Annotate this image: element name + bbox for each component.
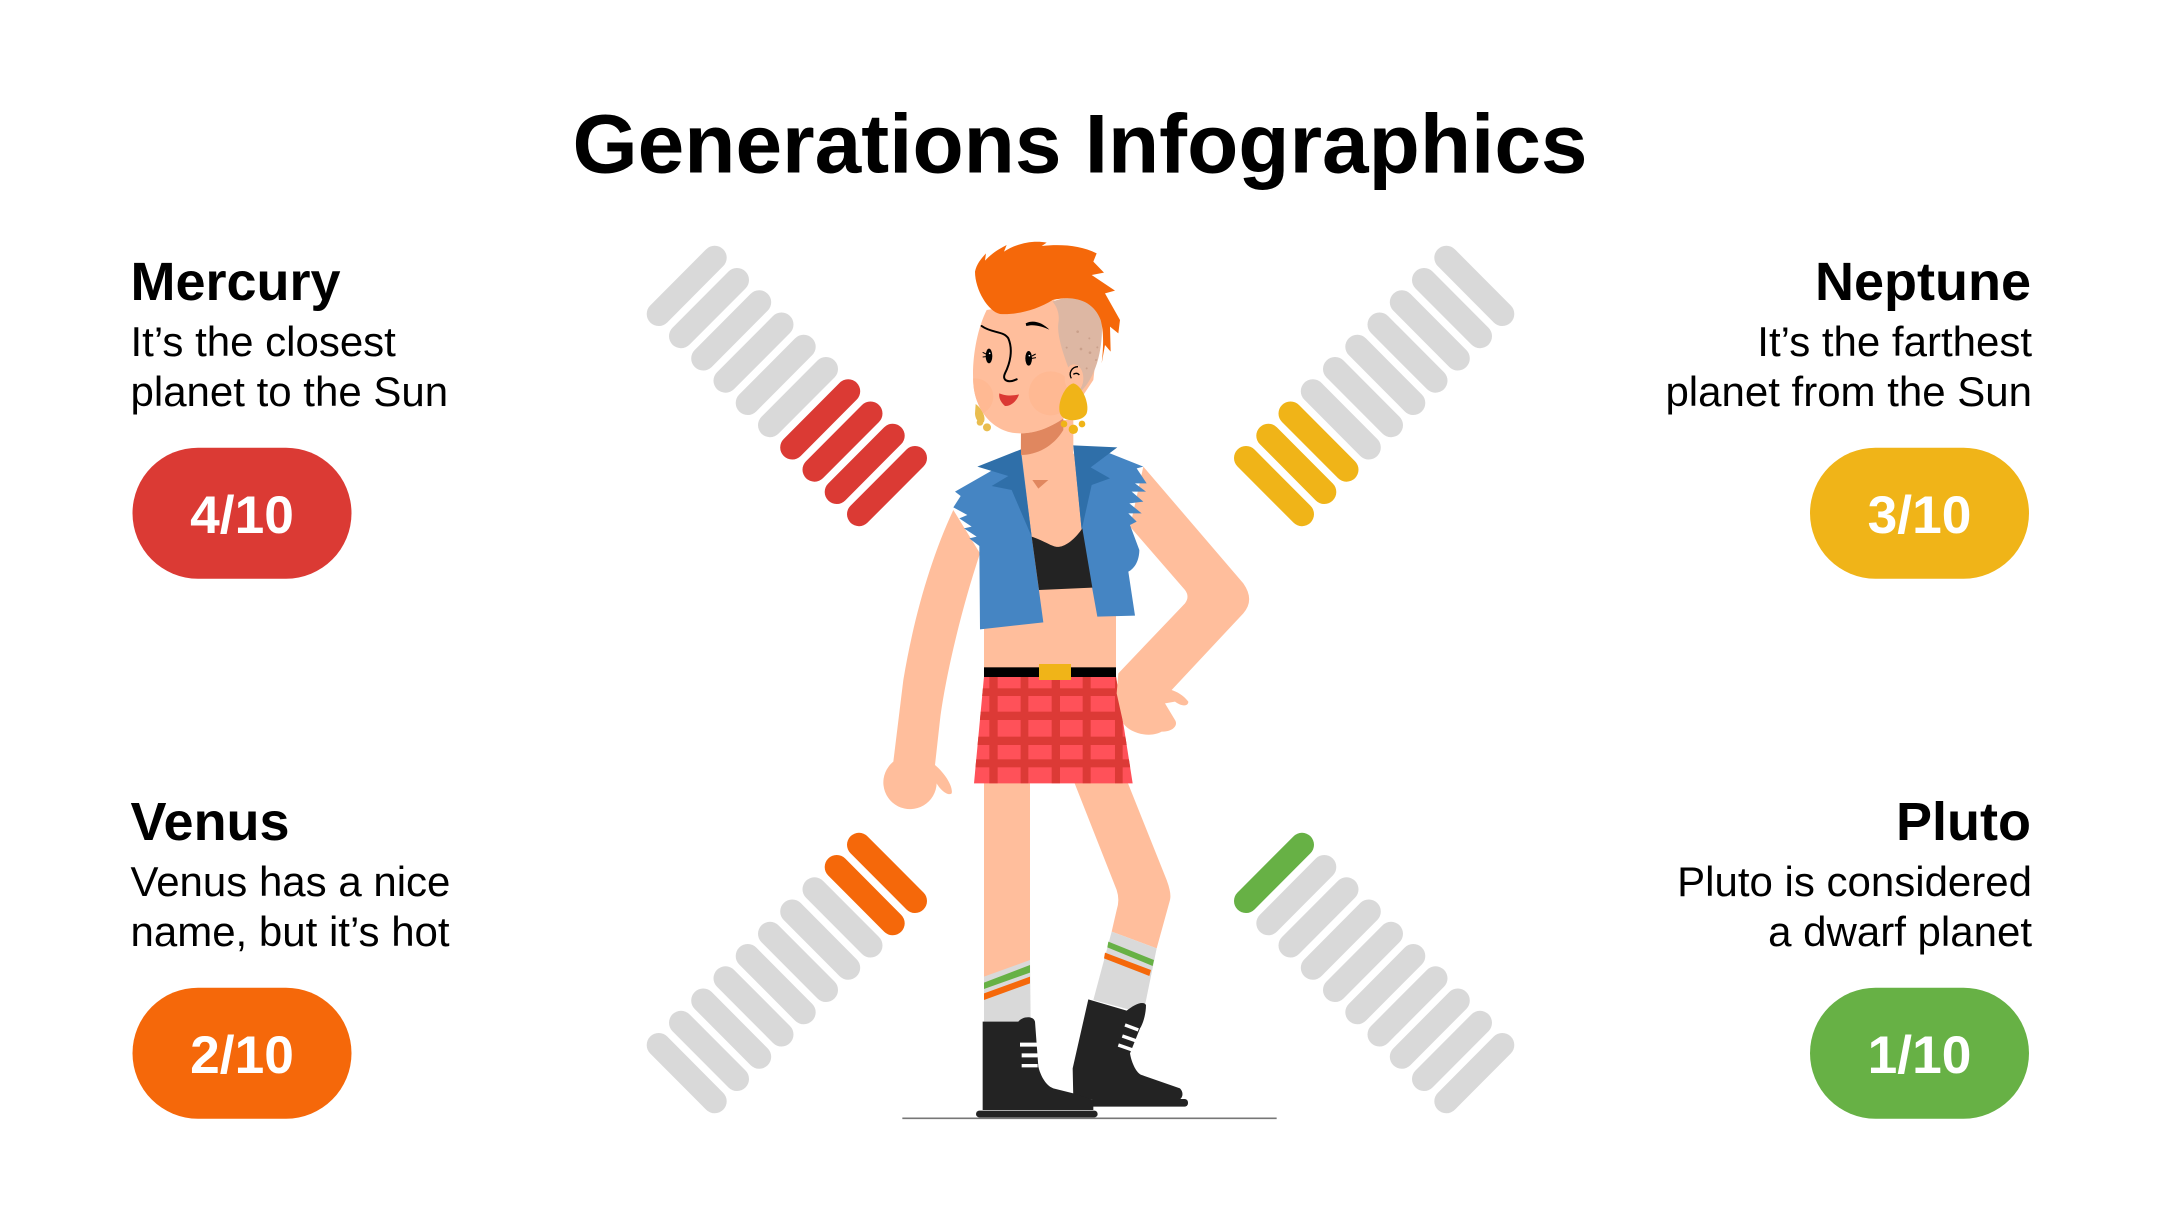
panel: Venus: [130, 792, 450, 1119]
crop top: [1032, 528, 1092, 590]
text: Pluto description: a dwarf planet: [1768, 908, 2032, 955]
panel: Mercury: [130, 252, 448, 579]
legs: [984, 780, 1170, 1023]
text: Venus description: name, but it’s hot: [130, 908, 450, 955]
score pill: 2/10: 2/10: [190, 1026, 294, 1085]
score pill: 1/10: 1/10: [1868, 1026, 1971, 1085]
heading: Pluto: Pluto: [1896, 792, 2031, 852]
socks: [984, 932, 1157, 1023]
illustration: punk character: [883, 242, 1277, 1118]
text: Venus description: Venus has a nice: [130, 858, 450, 905]
vest: [953, 445, 1147, 629]
meter: Pluto 1 of 10 bars: [1246, 845, 1502, 1101]
belt: [984, 664, 1116, 680]
boots: [976, 999, 1188, 1117]
title: Generations Infographics: [572, 96, 1588, 190]
text: Neptune description: It’s the farthest: [1757, 318, 2032, 365]
score pill: 3/10: [1810, 448, 2029, 579]
meter: Mercury 4 of 10 bars: [659, 258, 915, 514]
head: [973, 298, 1102, 434]
left arm and hand: [883, 510, 980, 809]
neck shadow: [1021, 417, 1063, 489]
text: Mercury description: It’s the closest: [130, 318, 396, 365]
skirt: [973, 673, 1133, 787]
left earring: [975, 404, 991, 431]
hair: [975, 242, 1120, 363]
text: Pluto description: Pluto is considered: [1677, 858, 2032, 905]
score pill: 4/10: [132, 448, 352, 579]
score pill: 3/10: 3/10: [1868, 486, 1971, 545]
right arm and hand: [1117, 467, 1249, 735]
meter: Venus 2 of 10 bars: [659, 845, 915, 1101]
ground line: [902, 1116, 1277, 1121]
meter: Neptune 3 of 10 bars: [1246, 258, 1502, 514]
panel: Neptune: [1665, 252, 2032, 579]
heading: Neptune: Neptune: [1815, 252, 2031, 312]
face features: [982, 322, 1049, 406]
score pill: 2/10: [132, 988, 352, 1119]
heading: Mercury: Mercury: [130, 252, 341, 312]
right earring: [1059, 383, 1087, 434]
text: Neptune description: planet from the Sun: [1665, 368, 2032, 415]
heading: Venus: Venus: [130, 792, 290, 852]
text: Mercury description: planet to the Sun: [130, 368, 448, 415]
score pill: 1/10: [1810, 988, 2029, 1119]
panel: Pluto: [1677, 792, 2032, 1119]
torso: [984, 420, 1116, 670]
score pill: 4/10: 4/10: [190, 486, 294, 545]
